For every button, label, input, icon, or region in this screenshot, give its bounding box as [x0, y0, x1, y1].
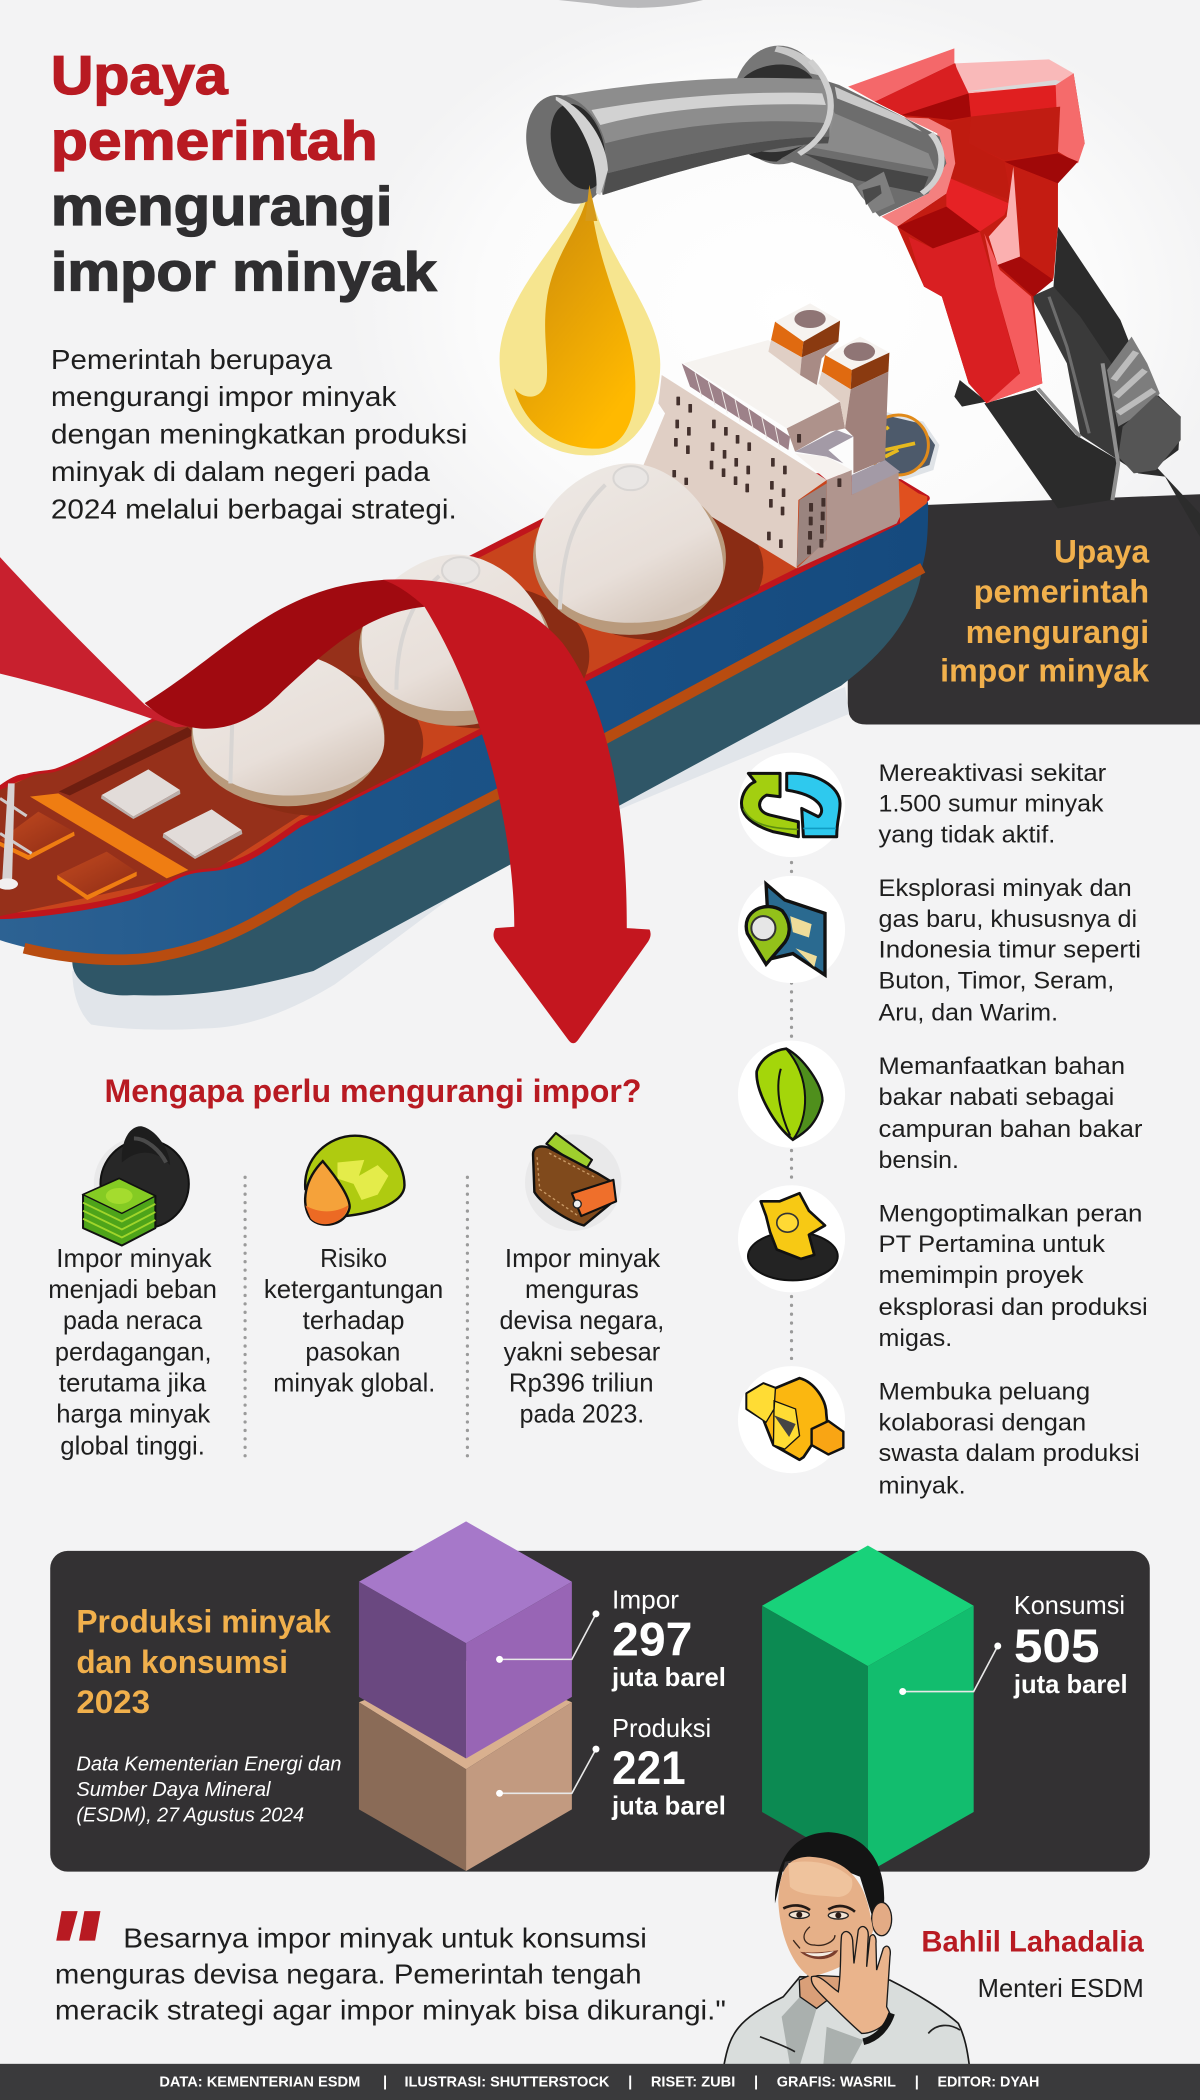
- bow deck hatches: [0, 769, 242, 900]
- intro text: Pemerintah berupaya: [51, 344, 333, 375]
- strategy text 2: gas baru, khususnya di: [879, 906, 1137, 933]
- panel heading: strategy: impor minyak: [940, 653, 1149, 689]
- strategy text 5: [879, 1379, 1140, 1499]
- red handle: [848, 48, 1085, 403]
- quote text: meracik strategi agar impor minyak bisa dikurangi.": [55, 1995, 726, 2026]
- strategy text 2: Indonesia timur seperti: [879, 937, 1141, 964]
- value: production: [611, 1715, 726, 1821]
- footer: EDITOR: DYAH: [937, 2075, 1039, 2091]
- reason 2 text: [264, 1245, 443, 1398]
- icon: recycle arrows: [738, 753, 845, 857]
- panel: reason 2: [264, 1136, 443, 1398]
- value: production: 221: [612, 1742, 686, 1794]
- reason 1 text: Impor minyak: [56, 1245, 212, 1273]
- strategy text 2: Aru, dan Warim.: [879, 1000, 1058, 1027]
- intro text: 2024 melalui berbagai strategi.: [51, 493, 457, 524]
- speaker name: Bahlil Lahadalia: [921, 1925, 1144, 1958]
- icon: globe and drop: [305, 1136, 404, 1225]
- value: import: 297: [612, 1613, 692, 1665]
- chart: import cube: [359, 1521, 572, 1758]
- strategy text 3: bakar nabati sebagai: [879, 1084, 1114, 1111]
- footer: RISET: ZUBI: [651, 2075, 735, 2091]
- ship superstructure: [640, 303, 927, 568]
- value: import: juta barel: [611, 1664, 726, 1692]
- strategy text 2: Buton, Timor, Seram,: [879, 967, 1114, 994]
- leader lines: [496, 1610, 1001, 1797]
- column dividers: [245, 1177, 467, 1458]
- intro text: minyak di dalam negeri pada: [51, 456, 431, 487]
- illustration: ship hull: [0, 498, 928, 995]
- footer: |: [628, 2075, 632, 2091]
- value: consumption: Konsumsi: [1014, 1592, 1125, 1620]
- chart: consumption cube: [762, 1546, 974, 1872]
- helipad: [868, 412, 939, 480]
- footer: ILUSTRASI: SHUTTERSTOCK: [404, 2075, 610, 2091]
- fuel nozzle: [515, 46, 1200, 537]
- strategy text 3: [879, 1053, 1142, 1174]
- intro text: dengan meningkatkan produksi: [51, 418, 467, 449]
- strategy text 4: eksplorasi dan produksi: [879, 1294, 1148, 1321]
- panel heading: Produksi minyak: [76, 1604, 331, 1640]
- panel: dark strategy header: [848, 494, 1200, 725]
- value: import: [611, 1586, 726, 1692]
- strategy text 5: kolaborasi dengan: [879, 1409, 1086, 1436]
- panel: reason 1: [48, 1126, 217, 1460]
- reason 1 text: perdagangan,: [55, 1339, 212, 1367]
- reason 3 text: [500, 1245, 664, 1428]
- source note: Sumber Daya Mineral: [76, 1779, 271, 1801]
- reason 2 text: pasokan: [305, 1339, 400, 1367]
- ship shadow: [72, 687, 849, 1030]
- panel heading: strategy: mengurangi: [966, 614, 1149, 650]
- reason 3 text: devisa negara,: [500, 1307, 664, 1335]
- reason 3 text: pada 2023.: [520, 1400, 644, 1428]
- reason 1 text: [48, 1245, 217, 1460]
- panel heading: [76, 1604, 331, 1720]
- quote mark: [56, 1911, 100, 1941]
- footer: |: [754, 2075, 758, 2091]
- strategy text 4: migas.: [879, 1325, 952, 1352]
- reason 2 text: Risiko: [320, 1245, 387, 1273]
- source note: (ESDM), 27 Agustus 2024: [76, 1804, 304, 1826]
- portrait: minister: [724, 1832, 969, 2065]
- value: consumption: 505: [1014, 1620, 1100, 1672]
- panel: reason 3: [500, 1133, 664, 1428]
- strategy text 2: [879, 875, 1141, 1027]
- strategy text 1: 1.500 sumur minyak: [879, 791, 1104, 818]
- value: import: Impor: [612, 1586, 680, 1614]
- value: production: juta barel: [611, 1793, 726, 1821]
- panel heading: strategy: Upaya: [1054, 534, 1150, 570]
- footer: GRAFIS: WASRIL: [777, 2075, 896, 2091]
- strategy text 1: yang tidak aktif.: [879, 821, 1055, 848]
- footer: |: [383, 2075, 387, 2091]
- strategy text 5: minyak.: [879, 1472, 966, 1499]
- icon: leaf: [738, 1041, 845, 1148]
- back collar: [732, 46, 826, 164]
- hose and trigger guard: [954, 227, 1200, 537]
- panel heading: strategy: pemerintah: [974, 574, 1149, 610]
- reason 3 text: Rp396 triliun: [509, 1370, 654, 1398]
- heading: why reduce imports: Mengapa perlu mengurangi impor?: [104, 1073, 642, 1109]
- title: mengurangi: [51, 175, 392, 237]
- ship deck: [0, 465, 927, 916]
- strategy text 1: Mereaktivasi sekitar: [879, 760, 1106, 787]
- intro text: mengurangi impor minyak: [51, 381, 397, 412]
- footer: DATA: KEMENTERIAN ESDM: [159, 2075, 360, 2091]
- main spout: [515, 61, 835, 209]
- source note: Data Kementerian Energi dan: [76, 1754, 342, 1776]
- strategy text 3: campuran bahan bakar: [879, 1116, 1142, 1143]
- value: consumption: [1013, 1592, 1128, 1699]
- strategy text 4: PT Pertamina untuk: [879, 1231, 1106, 1258]
- icon: wallet: [525, 1133, 621, 1231]
- chart: production cube: [359, 1661, 572, 1871]
- quote text: Besarnya impor minyak untuk konsumsi: [123, 1922, 647, 1953]
- strategy text 4: [879, 1200, 1148, 1352]
- strategy text 1: [879, 760, 1106, 848]
- title: pemerintah: [51, 109, 378, 171]
- icon: star on disc: [738, 1185, 845, 1292]
- strategy text 3: bensin.: [879, 1147, 959, 1174]
- value: production: Produksi: [612, 1715, 711, 1743]
- reason 3 text: Impor minyak: [505, 1245, 661, 1273]
- intro text: [51, 344, 467, 524]
- strategy text 4: memimpin proyek: [879, 1262, 1084, 1289]
- value: consumption: juta barel: [1013, 1671, 1128, 1699]
- panel heading: 2023: [76, 1684, 150, 1720]
- icon: map and pin: [738, 876, 845, 983]
- panel heading: strategy: [940, 534, 1150, 689]
- panel: production and consumption: [50, 1521, 1150, 1872]
- strategy text 4: Mengoptimalkan peran: [879, 1200, 1142, 1227]
- reason 3 text: yakni sebesar: [504, 1339, 661, 1367]
- drop tip: [585, 185, 597, 221]
- reason 1 text: harga minyak: [56, 1400, 211, 1428]
- reason 2 text: minyak global.: [273, 1370, 435, 1398]
- strategy list: [738, 753, 1148, 1499]
- reason 2 text: ketergantungan: [264, 1276, 443, 1304]
- panel heading: dan konsumsi: [76, 1644, 288, 1680]
- footer: |: [915, 2075, 919, 2091]
- quote text: menguras devisa negara. Pemerintah tengah: [55, 1958, 642, 1989]
- second tube section: [781, 80, 946, 217]
- icon: connector: [738, 1366, 845, 1473]
- quote text: [55, 1922, 726, 2026]
- title: impor minyak: [51, 241, 437, 303]
- title: Upaya: [51, 44, 228, 106]
- reason 1 text: terutama jika: [59, 1370, 207, 1398]
- icon: money bag and cash: [83, 1126, 189, 1246]
- reason 1 text: global tinggi.: [60, 1432, 205, 1460]
- drop of oil: [500, 185, 660, 455]
- down arrow ribbon: [0, 557, 651, 1043]
- reason 1 text: menjadi beban: [48, 1276, 217, 1304]
- footer: [0, 2064, 1200, 2100]
- strategy text 5: swasta dalam produksi: [879, 1440, 1140, 1467]
- strategy text 3: Memanfaatkan bahan: [879, 1053, 1125, 1080]
- strategy text 2: Eksplorasi minyak dan: [879, 875, 1132, 902]
- strategy text 5: Membuka peluang: [879, 1379, 1090, 1406]
- LNG tanks: [192, 463, 726, 806]
- reason 1 text: pada neraca: [63, 1307, 203, 1335]
- speaker name: [921, 1925, 1144, 2003]
- speaker name: Menteri ESDM: [978, 1975, 1144, 2003]
- title: [51, 44, 437, 303]
- source note: [76, 1754, 342, 1826]
- quote: [55, 1911, 726, 2026]
- reason 2 text: terhadap: [303, 1307, 404, 1335]
- reason 3 text: menguras: [525, 1276, 639, 1304]
